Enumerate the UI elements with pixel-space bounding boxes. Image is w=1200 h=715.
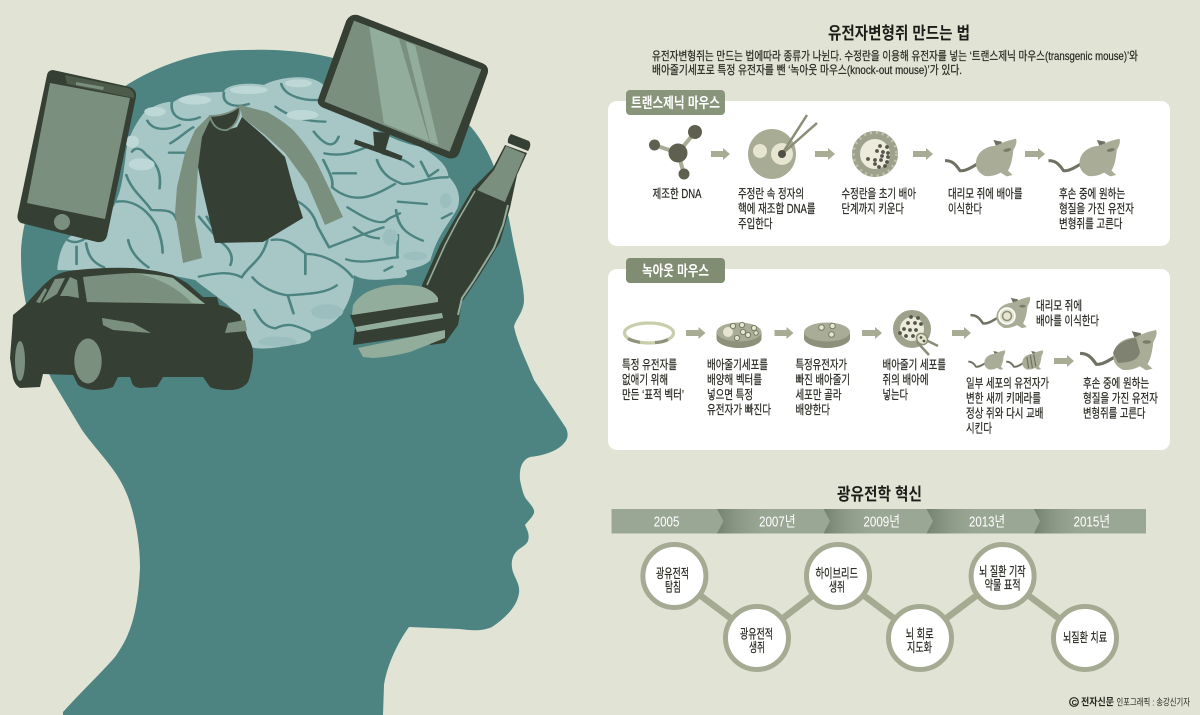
step labels: knock-out: 정상 쥐와 다시 교배 (966, 406, 1044, 420)
icon: fertilized egg injection (748, 115, 817, 179)
timeline node: brain circuit mapping: 뇌 회로 (906, 626, 934, 642)
step labels: transgenic: 핵에 재조합 DNA를 (738, 201, 816, 216)
step labels: knock-out: 없애기 위해 (622, 373, 668, 387)
timeline node: hybrid mouse (806, 544, 870, 608)
step labels: knock-out: 시킨다 (966, 422, 992, 436)
step labels: knock-out: 형질을 가진 유전자 (1083, 392, 1158, 406)
intro paragraph: 배아줄기세포로 특정 유전자를 뺀 ‘녹아웃 마우스(knock-out mouse)’가 있다. (652, 63, 962, 77)
step labels: knock-out: 유전자가 빠진다 (707, 403, 771, 417)
timeline node: optogenetic probe: 광유전적 (656, 566, 689, 581)
step labels: transgenic: 수정란을 초기 배아 (842, 187, 916, 201)
timeline year bar (612, 509, 1146, 534)
step labels: knock-out: 세포만 골라 (796, 388, 842, 402)
heading tag: transgenic mouse: 트랜스제닉 마우스 (631, 95, 720, 112)
panel: knock-out mouse (608, 258, 1170, 450)
step labels: transgenic: 제조한 DNA (652, 187, 702, 201)
timeline node: hybrid mouse: 하이브리드 (816, 566, 858, 581)
timeline node: optogenetic probe (643, 544, 706, 608)
icon: embryo with stem cell injection (896, 314, 938, 355)
step labels: transgenic: 대리모 쥐에 배아를 (948, 187, 1022, 201)
heading tag: knock-out mouse (626, 258, 725, 283)
timeline node: drug target (971, 544, 1034, 608)
step labels: knock-out: 변형쥐를 고른다 (1083, 406, 1146, 420)
timeline node: optogenetic mouse: 생쥐 (749, 640, 765, 655)
step labels: knock-out: 빠진 배아줄기 (796, 373, 850, 387)
timeline year bar: 2015년 (1074, 514, 1110, 530)
icon: targeting vector ring (624, 323, 674, 343)
icon: surrogate mouse with embryo (971, 297, 1030, 328)
step labels: knock-out: 배아줄기 세포를 (882, 358, 946, 372)
timeline year bar: 2005 (654, 514, 679, 530)
step labels: knock-out (622, 299, 1158, 436)
icon: t-shirt (175, 105, 343, 263)
heading tag: transgenic mouse (626, 90, 725, 115)
icon: smartphone (17, 70, 136, 242)
timeline connectors (674, 576, 1085, 638)
timeline year bar: 2013년 (969, 514, 1005, 530)
step labels: knock-out: 대리모 쥐에 (1036, 299, 1082, 313)
credit: 전자신문 (1081, 696, 1114, 708)
step labels: knock-out: 만든 ‘표적 벡터’ (622, 388, 684, 402)
step labels: knock-out: 변한 새끼 키메라를 (966, 392, 1041, 406)
step labels: transgenic: 단계까지 키운다 (842, 202, 904, 216)
step labels: transgenic (652, 187, 1134, 231)
step labels: knock-out: 배양한다 (796, 403, 830, 417)
step labels: transgenic: 후손 중에 원하는 (1059, 187, 1125, 201)
head silhouette (21, 50, 568, 715)
timeline node: drug target: 약물 표적 (985, 578, 1021, 592)
step labels: knock-out: 쥐의 배아에 (882, 373, 928, 387)
brain (57, 77, 459, 348)
step labels: transgenic: 주정란 속 정자의 (738, 187, 804, 201)
timeline node: drug target: 뇌 질환 기작 (979, 564, 1026, 579)
step labels: knock-out: 배아를 이식한다 (1036, 314, 1099, 328)
step labels: transgenic: 주입한다 (738, 217, 773, 231)
timeline node: optogenetic probe: 탐침 (665, 580, 681, 594)
step labels: transgenic: 형질을 가진 유전자 (1059, 202, 1134, 216)
icon: embryo (854, 132, 896, 176)
arrows: transgenic steps (711, 148, 1045, 160)
icon: DNA molecule (649, 125, 702, 180)
timeline node: brain disease treatment (1054, 606, 1116, 670)
heading tag: knock-out mouse: 녹아웃 마우스 (642, 263, 709, 280)
timeline year bar: 2009년 (863, 514, 900, 530)
icon: culture dish selected (804, 322, 850, 348)
icon: selected offspring mouse (1080, 330, 1157, 370)
step labels: knock-out: 넣는다 (882, 388, 908, 402)
step labels: knock-out: 배양해 벡터를 (707, 373, 762, 387)
credit (1070, 696, 1190, 708)
step labels: knock-out: 넣으면 특정 (707, 388, 753, 402)
icon: car (10, 268, 253, 390)
panel: transgenic mouse (608, 90, 1170, 246)
icon: hamburger (350, 285, 445, 358)
main title: 유전자변형쥐 만드는 법 (828, 24, 970, 43)
timeline year bar: 2007년 (759, 514, 796, 530)
step labels: knock-out: 특정 유전자를 (622, 358, 677, 372)
step labels: transgenic: 변형쥐를 고른다 (1059, 217, 1123, 231)
step labels: knock-out: 후손 중에 원하는 (1083, 376, 1149, 390)
icon: surrogate mouse (945, 139, 1016, 176)
icon: soda bottle (422, 134, 530, 345)
timeline title: 광유전학 혁신 (837, 485, 922, 504)
step labels: knock-out: 배아줄기세포를 (707, 358, 768, 372)
icon: monitor (318, 15, 488, 161)
timeline node: brain circuit mapping (888, 606, 952, 670)
icon: culture dish with vector (716, 322, 762, 348)
arrows: knock-out steps (686, 327, 1074, 367)
timeline node: optogenetic mouse: 광유전적 (740, 626, 773, 642)
step labels: transgenic: 이식한다 (948, 202, 982, 216)
icon: offspring mouse (1048, 139, 1120, 176)
step labels: knock-out: 특정유전자가 (796, 358, 847, 372)
icon: chimera pups (968, 350, 1043, 370)
credit: C (1072, 698, 1078, 707)
timeline node: hybrid mouse: 생쥐 (829, 580, 845, 594)
timeline node: brain circuit mapping: 지도화 (907, 640, 932, 655)
step labels: knock-out: 일부 세포의 유전자가 (966, 376, 1049, 390)
timeline node: optogenetic mouse (726, 606, 788, 670)
intro paragraph (652, 49, 1138, 77)
timeline node: brain disease treatment: 뇌질환 치료 (1063, 630, 1107, 645)
